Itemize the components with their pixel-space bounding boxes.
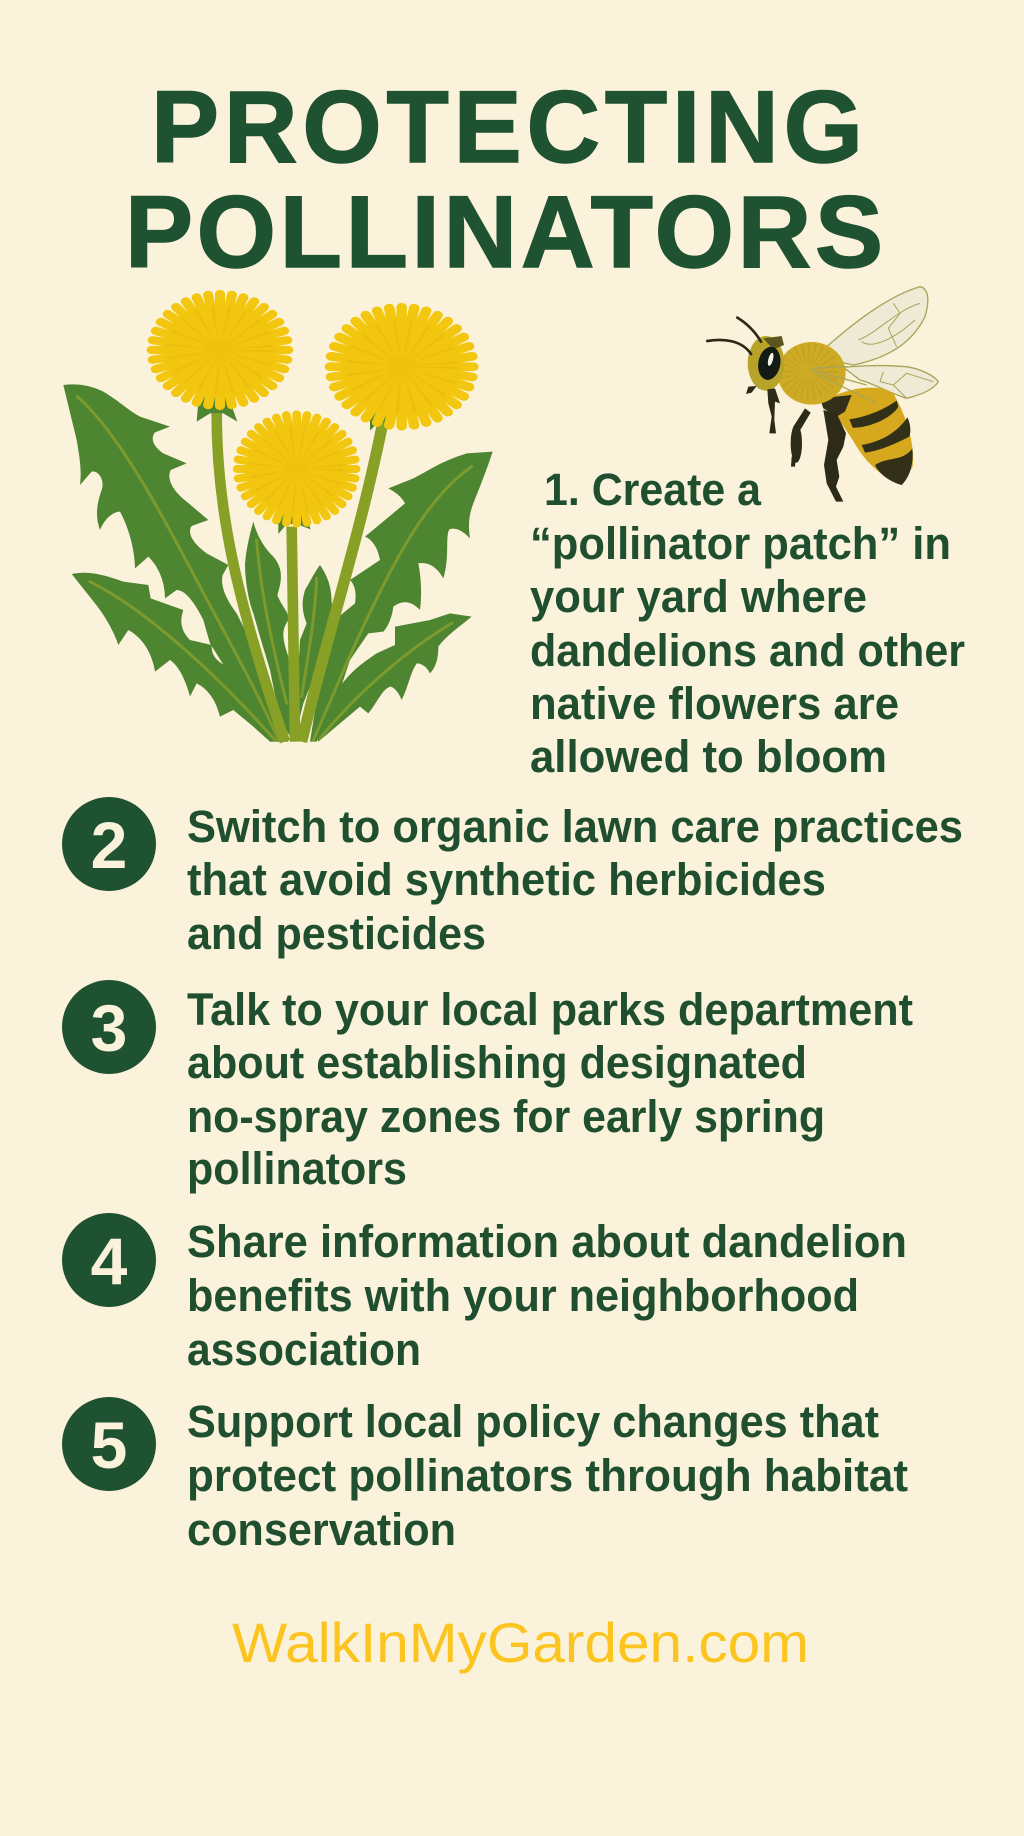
number badge 2: 2 bbox=[91, 808, 127, 882]
step 2 text: and pesticides bbox=[187, 908, 486, 959]
step 2 text: Switch to organic lawn care practices bbox=[187, 801, 963, 852]
step 1 text: your yard where bbox=[530, 571, 867, 622]
step 1 text: allowed to bloom bbox=[530, 731, 887, 782]
antennae bbox=[707, 318, 761, 354]
number badge 4 bbox=[62, 1213, 156, 1307]
step 3 text: Talk to your local parks department bbox=[187, 984, 913, 1035]
flower head right bbox=[330, 307, 473, 426]
number badge 3 bbox=[62, 980, 156, 1074]
number badge 2 bbox=[62, 797, 156, 891]
step 3 text bbox=[187, 984, 913, 1194]
number badge 3: 3 bbox=[91, 991, 127, 1065]
step 1 text: dandelions and other bbox=[530, 625, 965, 676]
flower head left bbox=[152, 294, 288, 406]
step 4 text: association bbox=[187, 1324, 421, 1375]
number badge 4: 4 bbox=[91, 1224, 128, 1298]
mouth and legs bbox=[746, 386, 846, 502]
step 5 text bbox=[187, 1396, 908, 1555]
step 4 text: Share information about dandelion bbox=[187, 1216, 907, 1267]
step 1 text: “pollinator patch” in bbox=[530, 518, 951, 569]
icon: bee bbox=[707, 287, 938, 502]
icon: dandelion plant bbox=[63, 294, 493, 742]
number badge 5: 5 bbox=[91, 1408, 127, 1482]
step 4 text: benefits with your neighborhood bbox=[187, 1270, 859, 1321]
wings bbox=[827, 287, 938, 398]
step 5 text: protect pollinators through habitat bbox=[187, 1450, 908, 1501]
step 5 text: Support local policy changes that bbox=[187, 1396, 879, 1447]
step 4 text bbox=[187, 1216, 907, 1375]
step 3 text: about establishing designated bbox=[187, 1037, 807, 1088]
step 5 text: conservation bbox=[187, 1504, 456, 1555]
step 3 text: pollinators bbox=[187, 1143, 407, 1194]
bracts bbox=[197, 385, 390, 534]
abdomen bbox=[823, 388, 913, 485]
title: PROTECTING bbox=[151, 70, 863, 184]
leaves bbox=[63, 384, 493, 742]
step 1 text bbox=[530, 464, 965, 782]
thorax bbox=[778, 342, 846, 405]
flower head centre bbox=[237, 414, 356, 524]
title bbox=[125, 70, 883, 289]
leaf midribs bbox=[77, 397, 472, 740]
wing overlay bbox=[812, 367, 877, 403]
head bbox=[748, 336, 784, 391]
step 1 text: 1. Create a bbox=[544, 464, 762, 515]
number badge 5 bbox=[62, 1397, 156, 1491]
step 1 text: native flowers are bbox=[530, 678, 899, 729]
title: POLLINATORS bbox=[125, 175, 883, 289]
step 2 text bbox=[187, 801, 963, 959]
footer website: WalkInMyGarden.com bbox=[232, 1611, 809, 1674]
stems bbox=[217, 413, 383, 742]
step 3 text: no-spray zones for early spring bbox=[187, 1091, 825, 1142]
step 2 text: that avoid synthetic herbicides bbox=[187, 854, 826, 905]
eye bbox=[756, 345, 783, 382]
